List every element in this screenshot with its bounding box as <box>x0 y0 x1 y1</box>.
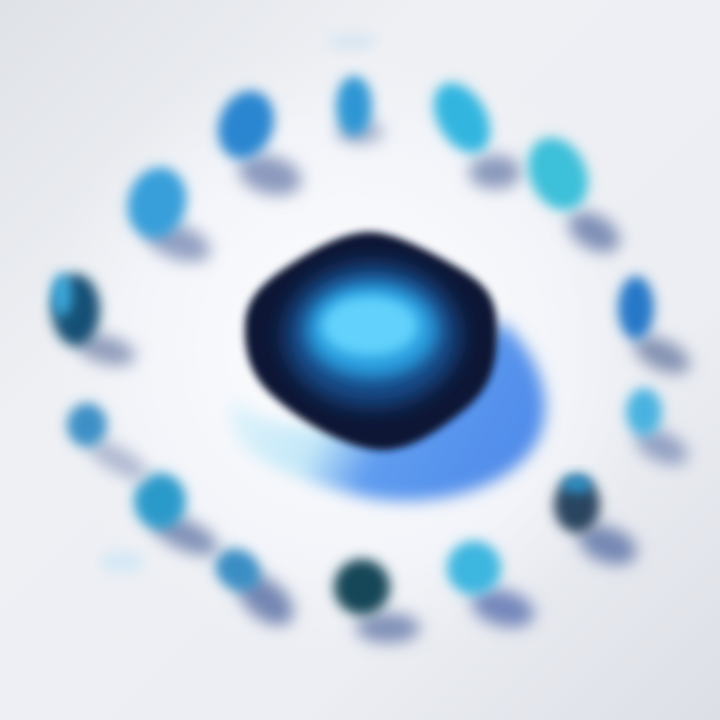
icon: top right 2 <box>517 128 627 261</box>
icon: top right 1 <box>422 73 521 189</box>
icon: right 2 <box>626 388 694 472</box>
icon: lower right dark <box>554 475 642 572</box>
faint mark <box>100 551 144 573</box>
icon: upper left <box>120 161 216 270</box>
hexagon inner ring <box>284 263 460 407</box>
faint top mark <box>328 34 376 50</box>
glowing core <box>306 282 438 378</box>
icon: left small <box>67 403 153 487</box>
ring of satellite icons <box>52 34 696 643</box>
icon: bottom left <box>207 540 303 635</box>
icon: left dark <box>52 273 139 371</box>
background glow <box>40 40 660 660</box>
icon: top left <box>209 83 306 202</box>
icon: right 1 <box>618 276 696 381</box>
bright centre <box>322 296 418 356</box>
icon: bottom right <box>447 541 539 634</box>
icon: top <box>336 76 384 144</box>
hexagon body <box>245 232 497 450</box>
central hexagon icon <box>230 232 545 501</box>
icon: bottom dark <box>334 559 420 643</box>
icon: lower left <box>100 473 224 573</box>
blue swoosh shadow <box>230 320 545 501</box>
